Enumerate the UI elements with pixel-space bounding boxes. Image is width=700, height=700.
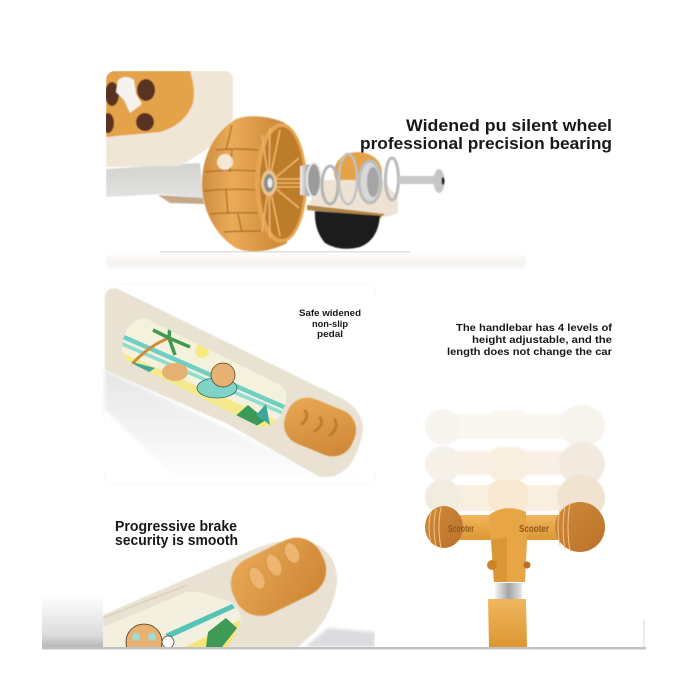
panel: adjustable handlebar: [384, 285, 646, 647]
pedal body: [103, 541, 337, 647]
icon: brake button: [278, 391, 362, 463]
handlebar: Scooter: [448, 524, 474, 535]
sticker: capybara and leaves: [103, 592, 240, 647]
text: handlebar description: length does not change the car: [447, 346, 612, 358]
ghost handlebar level 2: [425, 475, 605, 521]
floor shading: [106, 252, 526, 270]
left grey shadow: [42, 595, 104, 648]
heading: wheel: professional precision bearing: [360, 134, 612, 153]
text: safe widened non-slip pedal: Safe widened: [299, 308, 361, 318]
cream fork and orange backdrop: [307, 152, 398, 218]
grey floor shadow: [305, 628, 375, 647]
text: handlebar description: height adjustable, and the: [472, 334, 612, 346]
icon: brake button: [230, 536, 327, 617]
handlebar: Scooter: [519, 524, 549, 535]
text: safe widened non-slip pedal: pedal: [317, 329, 343, 339]
text: handlebar description: The handlebar has 4 levels of: [456, 322, 613, 334]
heading: progressive brake: Progressive brake: [115, 519, 237, 535]
heading: wheel: Widened pu silent wheel: [406, 116, 612, 135]
heading: progressive brake: security is smooth: [115, 533, 238, 549]
ghost handlebar level 3: [425, 442, 605, 486]
handlebar: [425, 502, 605, 647]
heading: progressive brake: [115, 519, 238, 549]
panel: progressive brake: [103, 520, 375, 647]
text: safe widened non-slip pedal: non-slip: [312, 319, 349, 329]
pedal shadow: [105, 370, 372, 482]
panel: non-slip pedal: [104, 284, 376, 484]
heading: wheel: [360, 116, 612, 153]
sticker: beach scene: [122, 318, 286, 428]
black rear wheel: [315, 211, 380, 249]
ground shadow: [160, 251, 410, 252]
pedal body: [105, 288, 363, 477]
scooter body: [102, 71, 233, 204]
ghost handlebar level 4: [425, 405, 605, 447]
text: handlebar description: [447, 322, 613, 358]
panel: wheel and bearing: [102, 71, 636, 270]
icon: wheel: [202, 116, 307, 251]
icon: exploded bearing parts: [300, 154, 444, 204]
text: safe widened non-slip pedal: [299, 308, 361, 339]
